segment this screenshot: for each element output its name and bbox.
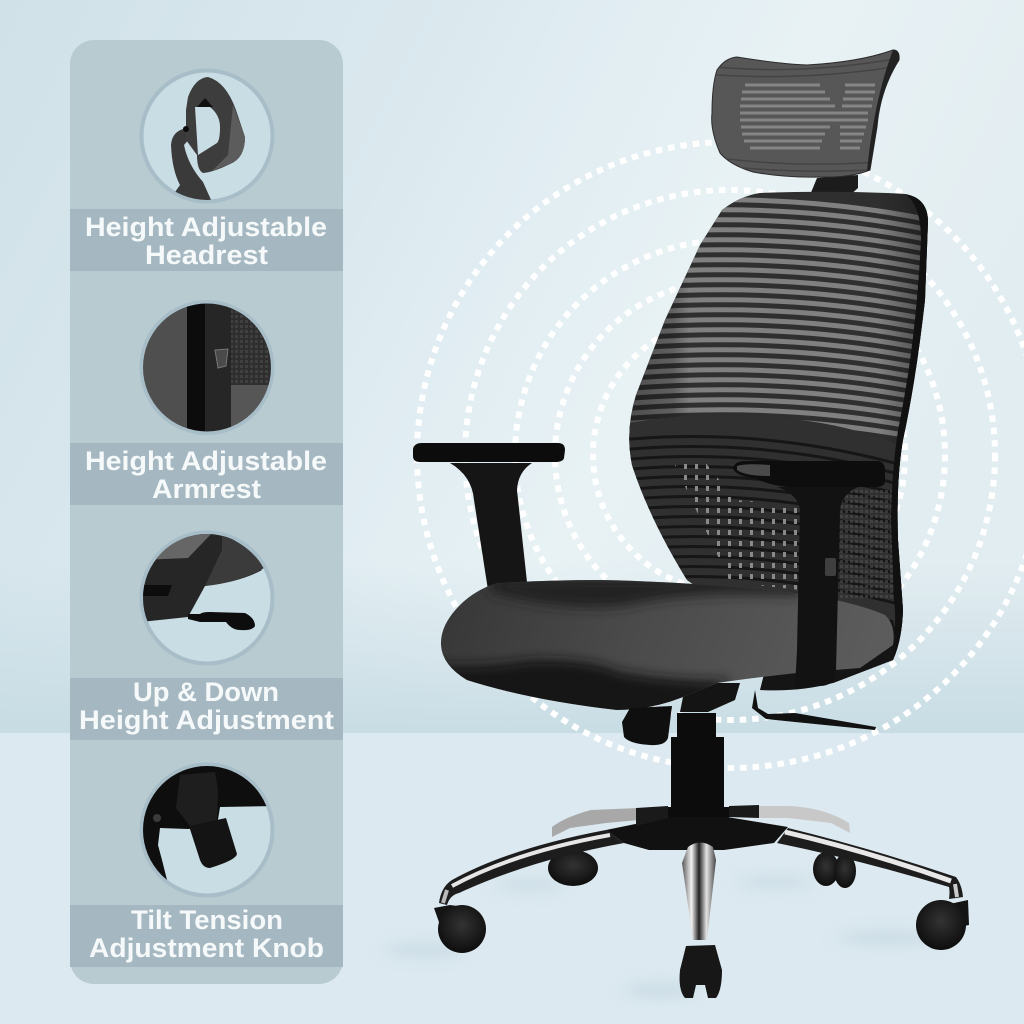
front left chrome leg — [439, 830, 624, 905]
label: height adjustable headrest — [70, 209, 343, 271]
tension knob — [622, 706, 672, 745]
front right chrome leg — [777, 828, 963, 899]
rear right chrome leg — [759, 806, 850, 833]
concentric dotted rings — [417, 142, 1024, 768]
label: tilt tension adjustment knob: Adjustment Knob — [89, 933, 324, 963]
height lever — [752, 690, 876, 730]
floor shadows — [383, 878, 945, 995]
headrest bracket — [810, 175, 858, 197]
rear casters — [548, 850, 856, 888]
label: height adjustable headrest: Headrest — [145, 240, 268, 270]
label: up and down height adjustment: Up & Down — [133, 677, 279, 707]
icon: tilt knob detail — [140, 760, 275, 896]
icon: headrest detail — [142, 70, 272, 205]
hub shoulders — [636, 805, 759, 826]
label: height adjustable headrest: Height Adjustable — [85, 212, 327, 242]
label: height adjustable armrest — [70, 443, 343, 505]
label: height adjustable armrest: Armrest — [152, 474, 261, 504]
left armrest — [413, 443, 565, 590]
feature: height adjustable headrest — [70, 70, 343, 271]
label: height adjustable armrest: Height Adjustable — [85, 446, 327, 476]
seat mechanism and label — [680, 683, 740, 712]
star base hub — [606, 817, 788, 850]
label: tilt tension adjustment knob — [70, 905, 343, 967]
gas cylinder — [668, 713, 729, 818]
front centre chrome leg — [682, 842, 716, 940]
feature: height adjustable armrest — [70, 300, 343, 505]
icon: height lever detail — [140, 530, 272, 664]
back rest lower shell — [760, 610, 896, 690]
right armrest — [733, 461, 885, 688]
feature: up and down height adjustment — [70, 530, 343, 740]
feature: tilt tension adjustment knob — [70, 760, 343, 967]
front casters — [434, 900, 969, 998]
panel: features sidebar — [70, 40, 343, 984]
label: up and down height adjustment — [70, 677, 343, 740]
icon: armrest detail — [140, 300, 275, 436]
mesh headrest — [705, 50, 900, 177]
mesh backrest — [620, 190, 940, 700]
office chair — [413, 50, 969, 998]
rear left chrome leg — [552, 808, 638, 837]
label: up and down height adjustment: Height Adjustment — [79, 705, 334, 735]
seat cushion — [435, 578, 894, 720]
label: tilt tension adjustment knob: Tilt Tension — [131, 905, 283, 935]
